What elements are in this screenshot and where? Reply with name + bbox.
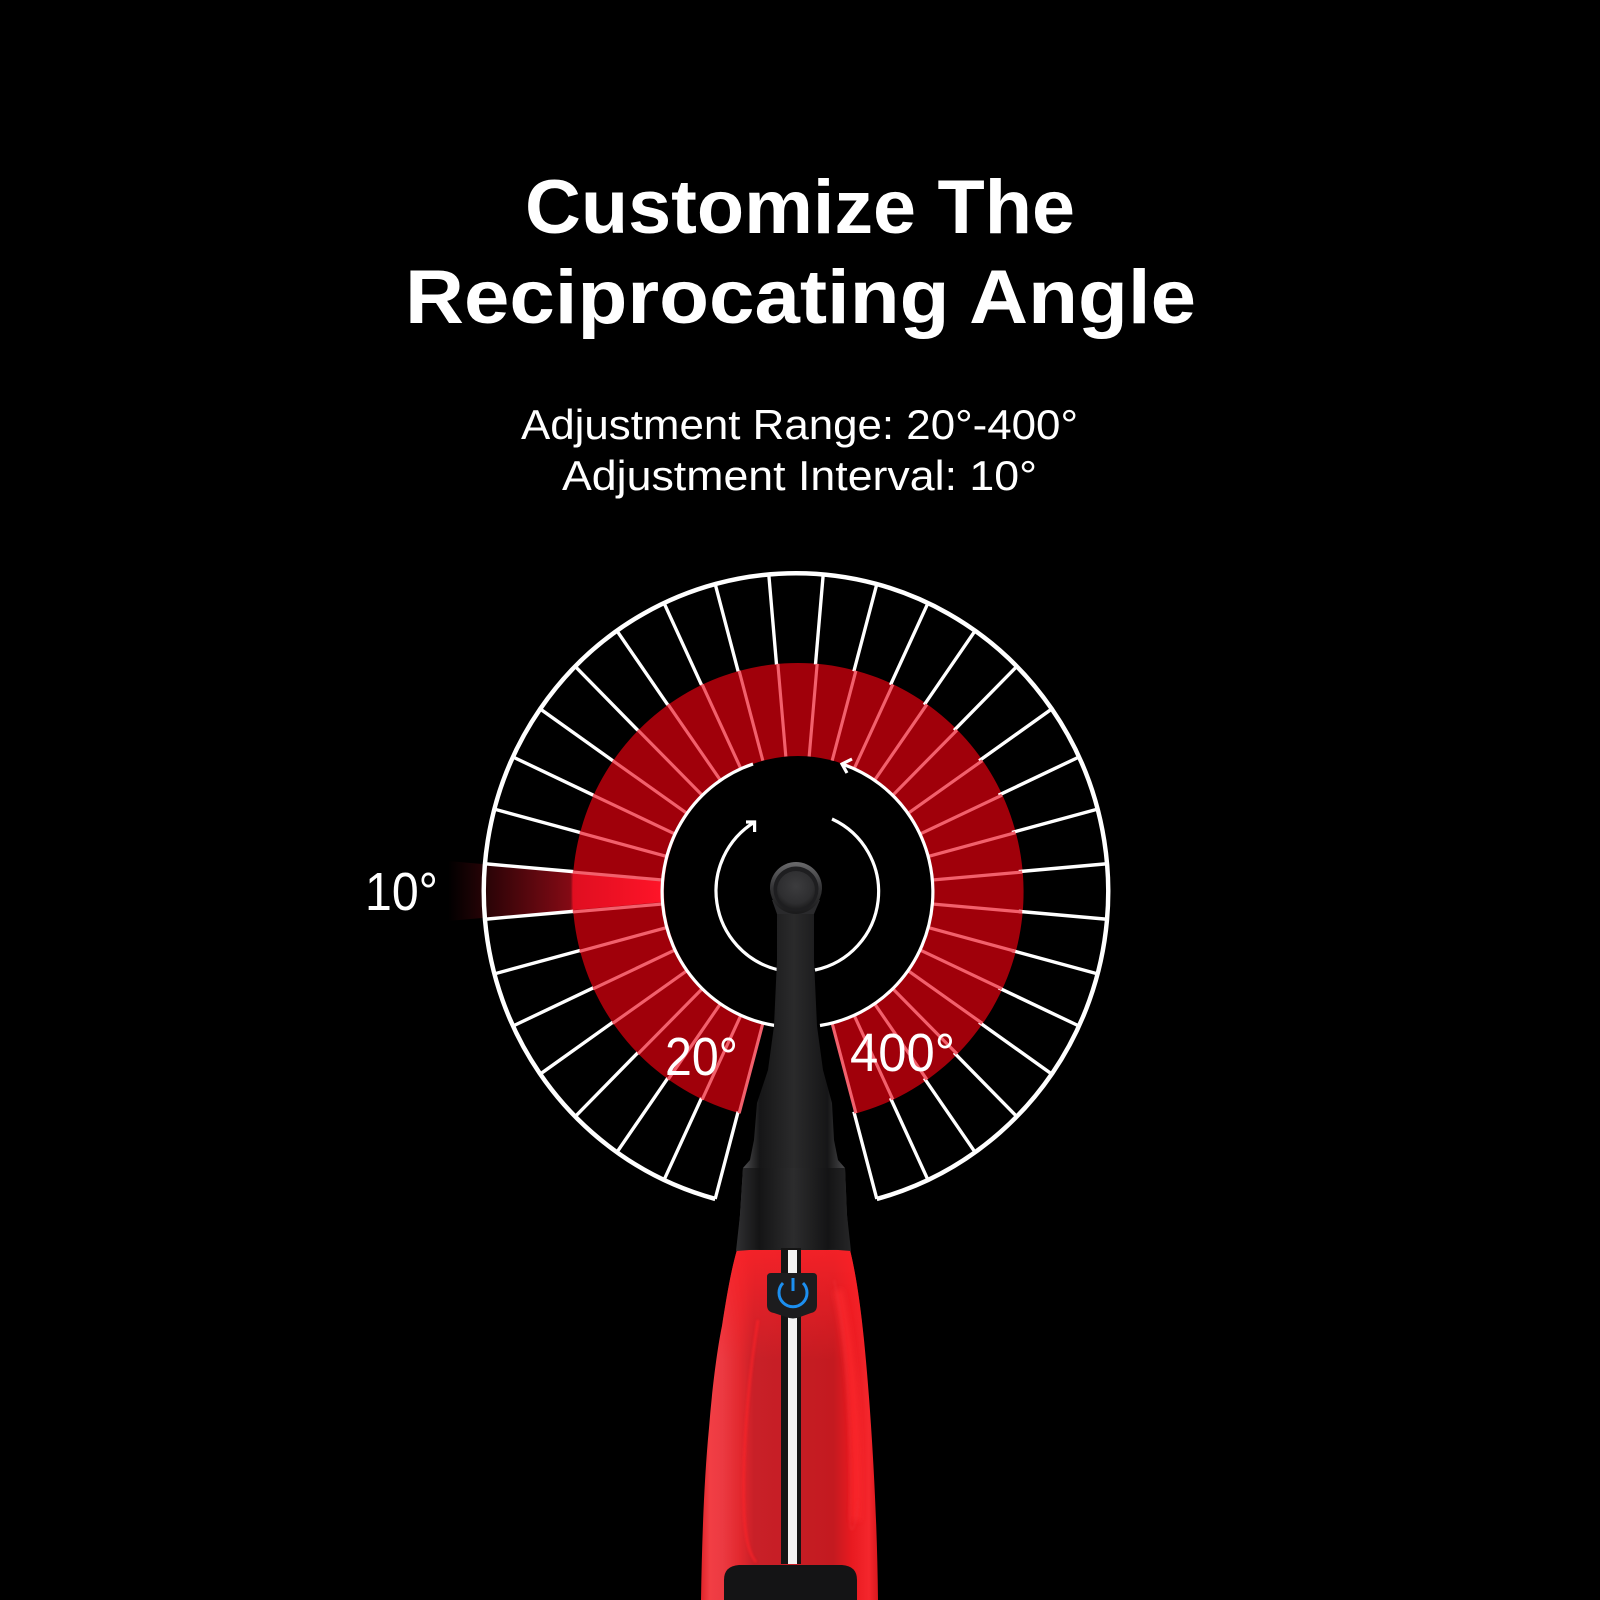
pink spokes inside the ring [573,664,1022,1113]
red ring: adjustable range [572,663,1024,1113]
display panel [724,1565,857,1600]
power button [767,1273,817,1318]
collar shading [736,1168,851,1251]
highlighted 10 degree wedge [448,861,664,921]
head of handpiece [770,862,822,914]
dial scale: outer arc and white spokes [484,573,1108,1199]
subtitle: adjustment range and interval: Adjustment Interval: 10° [562,452,1037,499]
angle dial [448,573,1108,1199]
title: Reciprocating Angle [405,255,1196,340]
label: 20 degrees: 20° [665,1027,738,1087]
label: 10 degrees: 10° [365,862,438,922]
subtitle: adjustment range and interval [521,401,1078,499]
outer rotation arc with arrow [662,759,933,1026]
title [405,165,1196,340]
white center strip [781,1248,801,1564]
shoulder brightening [709,1250,870,1400]
handpiece [701,862,878,1600]
black neck [737,905,850,1250]
label: 400 degrees: 400° [850,1023,955,1083]
handle highlights [744,1280,858,1562]
inner rotation arc with arrow [716,819,879,970]
icon: power symbol [779,1278,807,1307]
red handle body [701,1250,878,1600]
subtitle: adjustment range and interval: Adjustment Range: 20°-400° [521,401,1078,448]
title: Customize The [525,165,1075,250]
